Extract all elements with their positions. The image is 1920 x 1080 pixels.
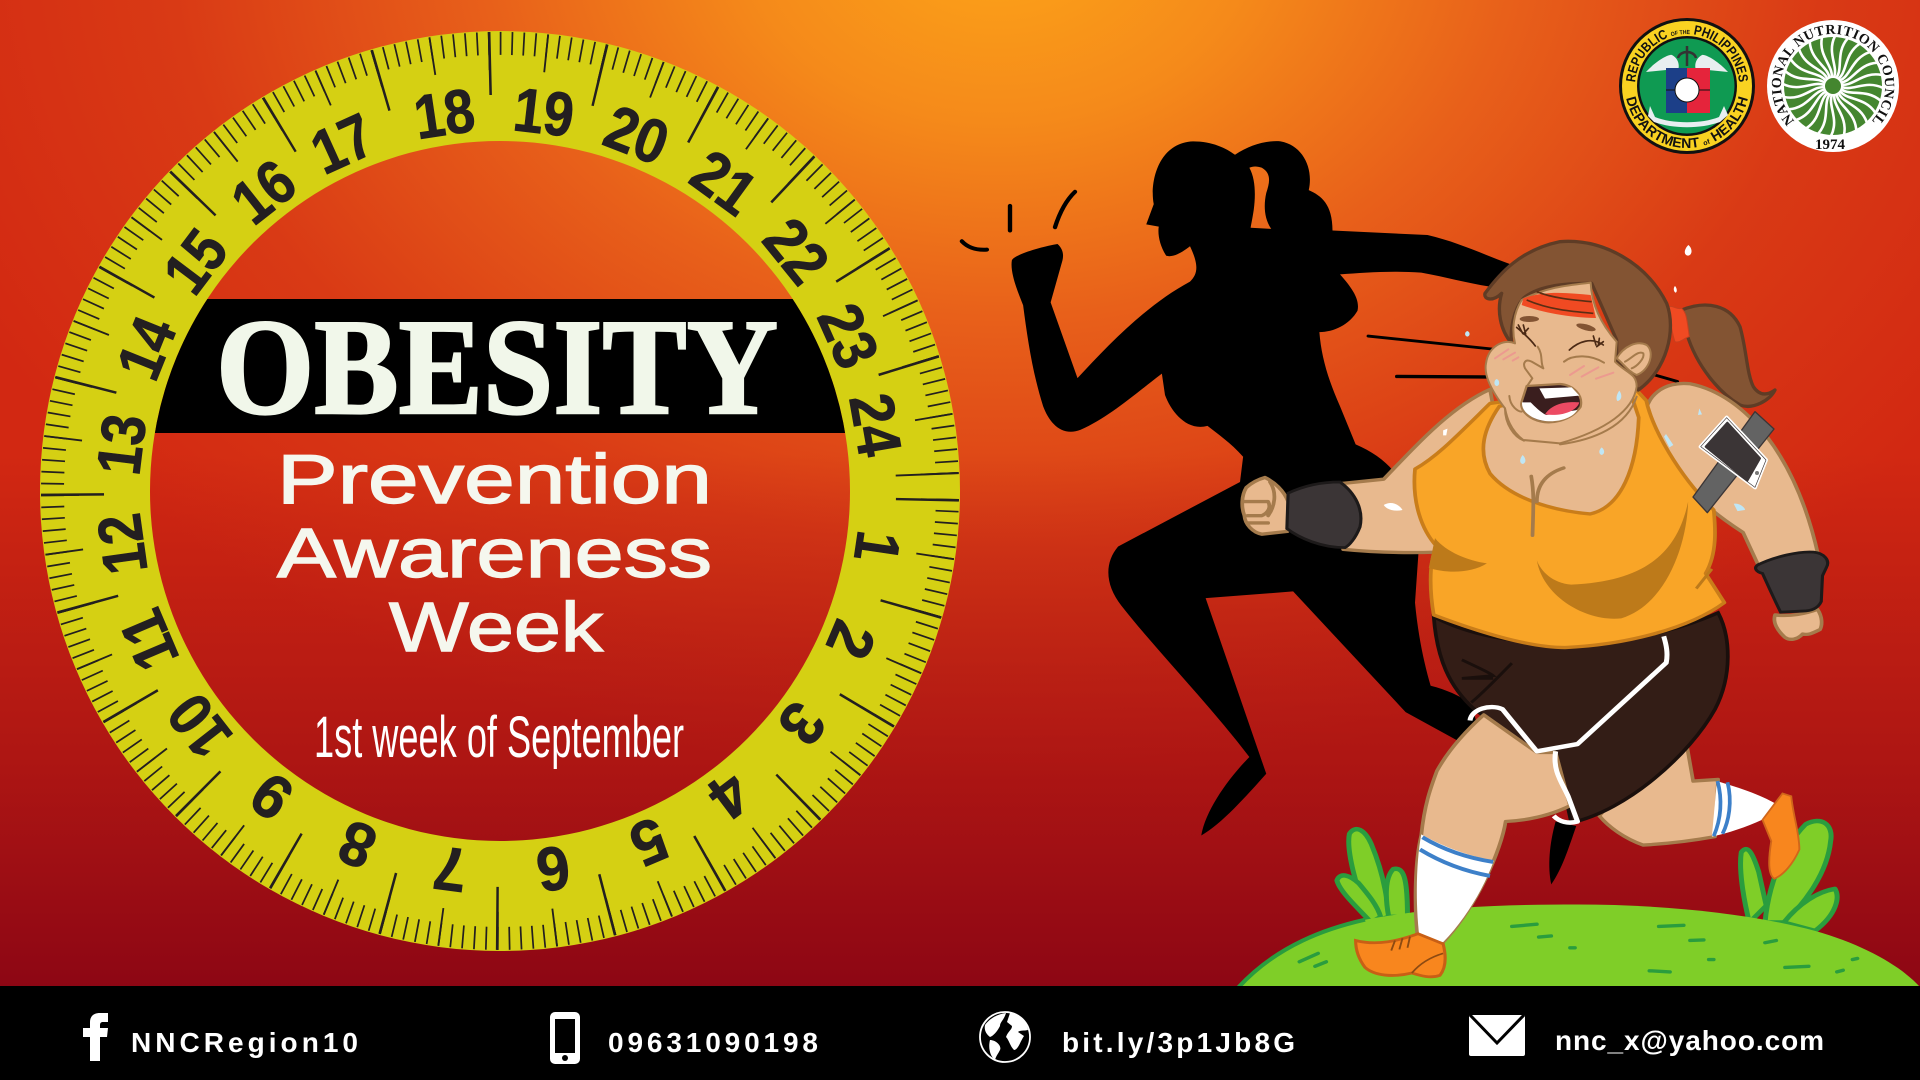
subtitle: Prevention Awareness Week: Prevention	[277, 440, 712, 518]
seal bottom lettering: DEPARTMENT of HEALTH	[1626, 96, 1748, 148]
black silhouette runner	[962, 141, 1678, 884]
ponytail and head back hair	[1668, 305, 1775, 406]
ring numbers: 7	[429, 832, 471, 905]
silhouette foot	[1549, 821, 1576, 884]
armband phone	[1701, 418, 1766, 487]
chest skin	[1483, 384, 1639, 514]
neck lines	[1505, 397, 1637, 444]
ring numbers: 9	[238, 758, 306, 833]
subtitle: Prevention Awareness Week: Week	[389, 588, 604, 666]
subtitle: Prevention Awareness Week: Awareness	[277, 514, 712, 592]
sweat drops	[1465, 331, 1702, 464]
orange tank top	[1414, 384, 1724, 648]
facebook handle: NNCRegion10	[131, 1027, 358, 1058]
ring numbers: 11	[107, 599, 193, 680]
footer bar	[0, 986, 1920, 1080]
seal wings	[1646, 55, 1728, 72]
eyebrows	[1520, 316, 1539, 322]
headband	[1522, 293, 1596, 318]
ring numbers: 20	[595, 92, 678, 179]
ring numbers: 1	[840, 527, 913, 566]
grass hill and bushes	[1239, 821, 1920, 987]
closed eyes	[1517, 325, 1603, 350]
ring numbers	[84, 75, 914, 905]
ring numbers: 3	[764, 689, 839, 757]
ring numbers: 19	[510, 75, 578, 151]
seal lettering: NATIONAL NUTRITION COUNCIL	[1772, 24, 1894, 126]
cheek lines and blush	[1495, 349, 1613, 379]
ring numbers: 12	[85, 509, 162, 578]
ring numbers: 22	[749, 206, 842, 297]
ring numbers: 13	[84, 411, 160, 479]
ring numbers: 6	[532, 831, 574, 904]
ring numbers: 24	[835, 388, 914, 462]
icon: mobile phone	[550, 1012, 580, 1064]
icon: globe	[980, 1012, 1030, 1062]
runner figure group	[962, 141, 1920, 987]
subtitle: Prevention Awareness Week	[277, 440, 712, 666]
hair	[1485, 241, 1670, 390]
shorts	[1434, 613, 1728, 823]
seal top lettering: REPUBLIC OF THE PHILIPPINES	[1626, 25, 1748, 82]
ring numbers: 2	[812, 611, 888, 668]
forward arm and fist	[1242, 389, 1496, 553]
raised arm on viewer's right	[1645, 383, 1828, 639]
ring numbers: 23	[803, 294, 892, 379]
icon: facebook	[83, 1013, 108, 1061]
logo: National Nutrition Council seal	[1767, 20, 1899, 153]
tank top shading	[1537, 502, 1688, 619]
sunburst rays	[1783, 36, 1883, 136]
logo: Department of Health seal	[1619, 18, 1755, 154]
speed lines	[1368, 336, 1678, 382]
ring numbers: 18	[410, 76, 479, 153]
impact marks by fist	[962, 192, 1075, 250]
ring numbers: 5	[620, 803, 677, 879]
sweat and highlights on body	[1443, 429, 1745, 511]
black title band	[140, 299, 860, 433]
shorts white trim	[1470, 636, 1667, 823]
seal shield	[1666, 68, 1710, 113]
open mouth	[1521, 384, 1581, 422]
email address: nnc_x@yahoo.com	[1555, 1025, 1824, 1056]
icon: envelope	[1469, 1015, 1525, 1056]
tape measure ring	[40, 31, 960, 951]
seal caduceus	[1678, 46, 1696, 66]
ring numbers: 14	[104, 307, 191, 389]
runner head and face	[1465, 241, 1774, 513]
ring numbers: 8	[329, 806, 386, 882]
ring numbers: 16	[219, 147, 309, 238]
date line: 1st week of September	[314, 705, 684, 770]
face	[1486, 283, 1637, 443]
white sweat flecks	[1674, 245, 1692, 293]
website link: bit.ly/3p1Jb8G	[1062, 1027, 1295, 1058]
back leg	[1599, 746, 1799, 879]
ring numbers: 10	[155, 680, 246, 770]
runner body	[1242, 383, 1828, 977]
ring numbers: 21	[678, 137, 769, 229]
ear	[1617, 343, 1651, 375]
ring numbers: 15	[151, 217, 242, 307]
seal ribbon	[1648, 106, 1728, 127]
armband strap	[1693, 412, 1774, 513]
seal year: 1974	[1815, 137, 1846, 153]
title: OBESITY: OBESITY	[216, 291, 778, 443]
ring numbers: 17	[301, 101, 384, 188]
phone number: 09631090198	[608, 1027, 818, 1058]
ring numbers: 4	[695, 757, 763, 833]
front thigh and sock	[1416, 715, 1570, 942]
front shoe	[1356, 934, 1445, 977]
nose	[1524, 347, 1543, 387]
